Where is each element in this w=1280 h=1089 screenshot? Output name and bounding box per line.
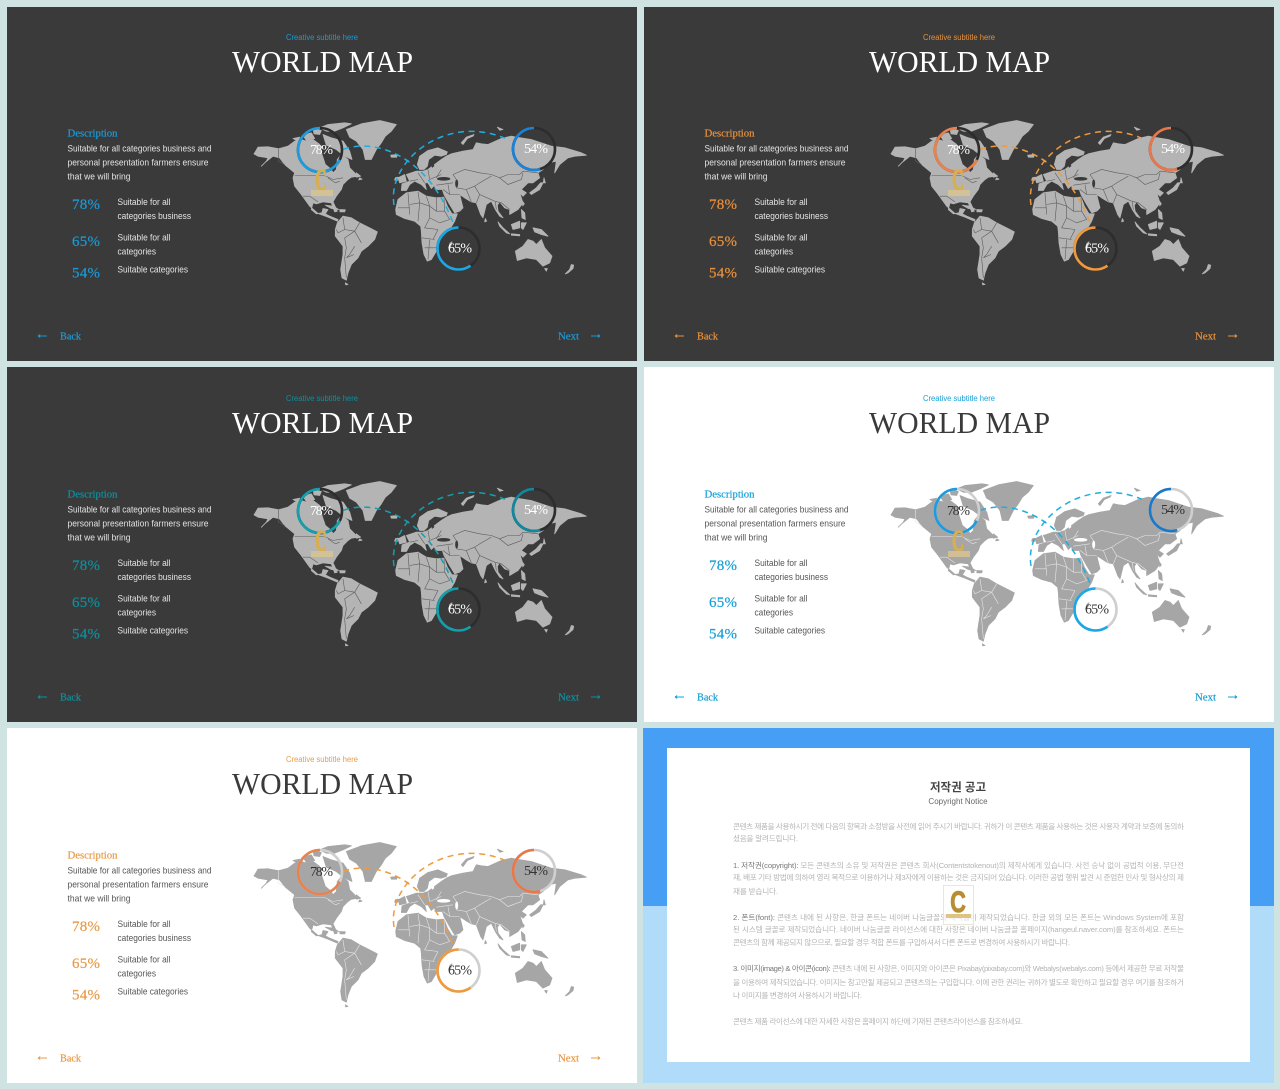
statistics list: Suitable for all	[118, 558, 170, 568]
next link: Next	[558, 1054, 579, 1064]
description block: Description	[68, 490, 118, 500]
description block: Suitable for all categories business and	[704, 144, 848, 154]
statistics list: categories business	[118, 211, 191, 221]
description block: that we will bring	[704, 172, 768, 182]
next link: Next	[1195, 692, 1216, 704]
panel: copyright notice	[643, 728, 1274, 1083]
panel: white slide with blue accent	[644, 367, 1274, 722]
subtitle: Creative subtitle here	[923, 33, 996, 42]
world map with progress rings: 78%	[310, 143, 333, 158]
statistics list: 78%	[709, 197, 737, 213]
description block	[68, 850, 212, 904]
statistics list: 65%	[709, 595, 737, 611]
statistics list: Suitable for all	[754, 197, 808, 207]
statistics list: Suitable categories	[118, 626, 188, 636]
statistics list: 65%	[72, 595, 100, 611]
back link	[38, 332, 81, 342]
statistics list	[72, 919, 191, 1004]
world map with progress rings: 65%	[448, 602, 472, 618]
description block: that we will bring	[68, 172, 130, 182]
back link: Back	[60, 332, 81, 342]
copyright body text: 나 이미지를 변경하여 사용하시기 바랍니다.	[733, 990, 862, 1000]
back link	[38, 692, 81, 704]
next link	[1195, 332, 1237, 342]
statistics list: 78%	[709, 558, 737, 574]
title: WORLD MAP	[232, 766, 413, 801]
world map with progress rings: 54%	[1161, 142, 1185, 157]
copyright body text: 콘텐츠의 함께 제공되지 않으므로, 필요할 경우 적합 폰트를 구입하셔서 다른 폰트로 변경하여 사용하시기 바랍니다.	[733, 937, 1070, 947]
next link	[558, 332, 600, 342]
subtitle: Creative subtitle here	[286, 394, 359, 403]
statistics list: categories business	[754, 211, 828, 221]
statistics list	[72, 558, 191, 642]
next link: Next	[558, 332, 579, 342]
description block: personal presentation farmers ensure	[68, 518, 208, 528]
logo watermark: C	[315, 163, 327, 197]
back link: Back	[60, 692, 81, 704]
logo watermark	[311, 163, 333, 197]
description block: personal presentation farmers ensure	[704, 158, 846, 168]
title: WORLD MAP	[232, 44, 413, 79]
copyright body text: 3. 이미지(image) & 아이콘(icon): 콘텐츠 내에 된 사항은, 이미지와 아이콘은 Pixabay(pixabay.com)와 Webalys(webalys.com) 등에서 제공한 무료 저작물	[733, 963, 1184, 973]
world map with progress rings: 54%	[524, 864, 548, 879]
world map with progress rings: 65%	[1085, 242, 1109, 256]
copyright body text: 재, 배포 기타 방법에 의하여 영리 목적으로 이용하거나 제3자에게 이용하는 것은 금지되어 있습니다. 이러한 공법 행위 발견 시 준엄한 민사 및 형사상의 제	[733, 872, 1184, 882]
statistics list: Suitable for all	[754, 558, 808, 568]
statistics list: Suitable for all	[754, 594, 808, 604]
copyright body text: 2. 폰트(font): 콘텐츠 내에 된 사항은, 한글 폰트는 네이버 나눔글꼴의 제작물이 제작되었습니다. 한글 외의 모든 폰트는 Windows System에 포함	[733, 912, 1184, 922]
title: WORLD MAP	[232, 405, 413, 440]
description block: that we will bring	[704, 532, 768, 542]
world map with progress rings: 78%	[310, 504, 333, 519]
statistics list: categories	[754, 608, 793, 618]
copyright body text: 셨음을 알려드립니다.	[733, 833, 798, 843]
statistics list: categories business	[118, 933, 191, 943]
world map with progress rings: 54%	[524, 142, 548, 157]
description block: Suitable for all categories business and	[704, 504, 848, 514]
back link: Back	[697, 332, 718, 342]
world map with progress rings: 54%	[1161, 503, 1185, 518]
description block: Description	[704, 128, 754, 140]
statistics list: categories business	[118, 572, 191, 582]
world map with progress rings	[254, 842, 586, 1007]
statistics list: 54%	[72, 988, 100, 1004]
description block: Suitable for all categories business and	[68, 504, 212, 514]
logo watermark	[948, 524, 970, 558]
logo watermark	[311, 524, 333, 558]
subtitle: Creative subtitle here	[286, 755, 359, 764]
back link	[38, 1054, 81, 1064]
statistics list: Suitable categories	[754, 264, 825, 274]
world map with progress rings	[254, 481, 586, 646]
statistics list: 54%	[709, 626, 737, 642]
statistics list: Suitable for all	[118, 232, 170, 242]
description block: Description	[68, 128, 118, 140]
statistics list: 54%	[709, 266, 737, 282]
statistics list: 54%	[72, 266, 100, 282]
copyright body text: 콘텐츠 제품 라이선스에 대한 자세한 사항은 홈페이지 하단에 기재된 콘텐츠라이선스를 참조하세요.	[733, 1016, 1023, 1026]
description block: that we will bring	[68, 894, 130, 904]
statistics list: Suitable categories	[118, 264, 188, 274]
copyright subheading: Copyright Notice	[928, 797, 988, 806]
next link	[558, 692, 600, 704]
statistics list: Suitable for all	[118, 954, 170, 964]
statistics list: Suitable categories	[118, 986, 188, 996]
statistics list: categories	[754, 246, 793, 256]
statistics list: Suitable for all	[118, 594, 170, 604]
description block: Description	[68, 850, 118, 862]
world map with progress rings: 78%	[947, 143, 970, 158]
panel: dark slide with orange accent	[644, 7, 1274, 361]
logo watermark: C	[315, 524, 327, 558]
statistics list	[709, 197, 828, 282]
copyright body text	[733, 821, 1184, 1026]
statistics list: 78%	[72, 558, 100, 574]
back link	[675, 692, 718, 704]
world map with progress rings: 54%	[524, 503, 548, 518]
statistics list	[709, 558, 828, 642]
statistics list: 54%	[72, 626, 100, 642]
back link: Back	[697, 692, 718, 704]
copyright body text: 콘텐츠 제품을 사용하시기 전에 다음의 항목과 소정방을 사전에 읽어 주시기 바랍니다. 귀하가 이 콘텐츠 제품을 사용하는 것은 사용자 계약과 보증에 동의하	[733, 821, 1184, 831]
logo watermark: C	[952, 524, 964, 558]
world map with progress rings: 65%	[448, 964, 472, 978]
panel: white slide with orange accent	[7, 728, 637, 1083]
statistics list: 65%	[72, 956, 100, 972]
description block: Suitable for all categories business and	[68, 866, 212, 876]
description block	[704, 490, 848, 542]
next link	[1195, 692, 1237, 704]
world map with progress rings: 65%	[448, 242, 472, 256]
back link: Back	[60, 1054, 81, 1064]
description block: Description	[704, 490, 754, 500]
next link: Next	[558, 692, 579, 704]
description block	[704, 128, 848, 182]
panel: dark slide with blue accent	[7, 7, 637, 361]
back link	[675, 332, 718, 342]
description block	[68, 128, 212, 182]
copyright body text: 을 이용하여 제작되었습니다. 이미지는 참고만될 제공되고 콘텐츠의는 구입합니다. 이에 관한 권리는 귀하가 별도로 확인하고 필요할 경우 여기를 참조하거	[733, 977, 1184, 987]
title: WORLD MAP	[869, 405, 1050, 440]
description block	[68, 490, 212, 542]
world map with progress rings: 78%	[947, 504, 970, 519]
subtitle: Creative subtitle here	[286, 33, 359, 42]
logo watermark: C	[950, 884, 966, 919]
copyright body text: 재를 받습니다.	[733, 886, 778, 896]
statistics list: categories business	[754, 572, 828, 582]
statistics list: 65%	[709, 234, 737, 250]
statistics list	[72, 197, 191, 282]
statistics list: Suitable for all	[118, 919, 170, 929]
world map with progress rings	[891, 120, 1223, 285]
statistics list: Suitable for all	[118, 197, 170, 207]
statistics list: 78%	[72, 919, 100, 935]
world map with progress rings	[254, 120, 586, 285]
logo watermark	[944, 884, 974, 924]
statistics list: 65%	[72, 234, 100, 250]
world map with progress rings: 65%	[1085, 602, 1109, 618]
copyright heading: 저작권 공고	[930, 780, 986, 794]
statistics list: Suitable for all	[754, 232, 808, 242]
description block: personal presentation farmers ensure	[68, 158, 208, 168]
next link	[558, 1054, 600, 1064]
statistics list: Suitable categories	[754, 626, 825, 636]
logo watermark	[948, 163, 970, 197]
description block: personal presentation farmers ensure	[704, 518, 846, 528]
copyright body text: 1. 저작권(copyright): 모든 콘텐츠의 소유 및 저작권은 콘텐츠 회사(Contentstokenout)의 제작사에게 있습니다. 사전 승낙 없이 공법적 이용, 무단전	[733, 860, 1184, 870]
subtitle: Creative subtitle here	[923, 394, 996, 403]
panel: dark slide with teal accent	[7, 367, 637, 722]
title: WORLD MAP	[869, 44, 1050, 79]
next link: Next	[1195, 332, 1216, 342]
description block: that we will bring	[68, 532, 130, 542]
statistics list: categories	[118, 968, 156, 978]
statistics list: 78%	[72, 197, 100, 213]
statistics list: categories	[118, 246, 156, 256]
world map with progress rings	[891, 481, 1223, 646]
description block: Suitable for all categories business and	[68, 144, 212, 154]
logo watermark: C	[952, 163, 964, 197]
world map with progress rings: 78%	[310, 865, 333, 880]
copyright body text: 된 시스템 글꼴로 제작되었습니다. 네이버 나눔글꼴 라이선스에 대한 사항은 네이버 나눔글꼴 홈페이지(hangeul.naver.com)를 참조하세요. 폰트는	[733, 924, 1184, 934]
description block: personal presentation farmers ensure	[68, 880, 208, 890]
statistics list: categories	[118, 608, 156, 618]
